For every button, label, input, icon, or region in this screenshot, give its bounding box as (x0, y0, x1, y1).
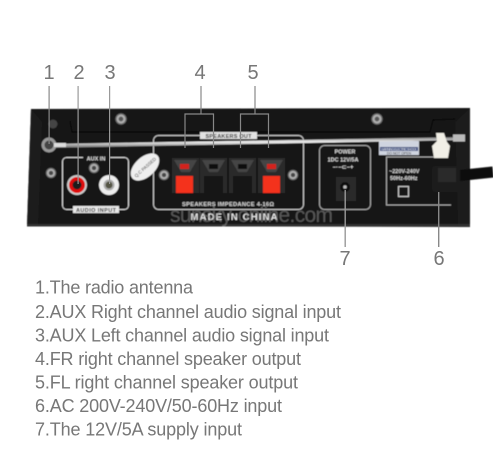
AC input group: ~220V-240V (389, 169, 420, 175)
terminal FR plus (172, 158, 199, 193)
screws (46, 113, 383, 180)
legend text list: 6.AC 200V-240V/50-60Hz input (35, 396, 282, 416)
callout 7 (339, 190, 351, 270)
speaker output group: SPEAKERS IMPEDANCE 4-16Ω (182, 202, 274, 208)
legend text list: 4.FR right channel speaker output (35, 349, 301, 369)
white RCA jack (99, 175, 119, 195)
legend text list: 3.AUX Left channel audio signal input (35, 326, 329, 346)
callout 2 (73, 62, 85, 184)
callout 1 (43, 62, 55, 144)
callout 3 (104, 62, 116, 184)
aux input group (62, 155, 128, 214)
legend text list: 7.The 12V/5A supply input (35, 420, 242, 440)
legend text list: 5.FL right channel speaker output (35, 372, 298, 392)
antenna clip (432, 133, 450, 158)
power input group: −·−⊂−+ (332, 165, 354, 171)
speaker output group (154, 132, 304, 210)
callout 6 (433, 192, 445, 270)
callout 3: 3 (104, 62, 116, 84)
AC input group (379, 141, 493, 205)
telescopic antenna (42, 133, 465, 158)
DC jack (336, 177, 356, 201)
AC input group: DO NOT OPEN (387, 152, 412, 156)
callout 6: 6 (433, 248, 445, 270)
amplifier rear panel (27, 108, 470, 227)
power input group (320, 146, 370, 210)
aux input group: AUDIO INPUT (76, 208, 117, 214)
power input group: 1DC 12V/5A (328, 158, 358, 164)
QC sticker: Q.C PASSED (134, 156, 158, 178)
power input group: POWER (335, 150, 355, 156)
callout 5: 5 (247, 62, 259, 84)
callout 1: 1 (43, 62, 55, 84)
legend text list: 2.AUX Right channel audio signal input (35, 302, 341, 322)
legend text list (35, 278, 341, 440)
amplifier illustration (27, 108, 493, 227)
watermark: sunsky-online.com (170, 204, 333, 227)
power cord (432, 166, 493, 192)
callout 4 (185, 62, 214, 148)
callout 4: 4 (194, 62, 206, 84)
made in china: MADE IN CHINA (190, 212, 278, 223)
callout 7: 7 (339, 248, 351, 270)
AC input group: WARNING ELECTRIC SHOCK (381, 147, 418, 151)
callout 5 (240, 62, 268, 148)
legend text list: 1.The radio antenna (35, 278, 194, 298)
speaker output group: SPEAKERS OUT (206, 134, 252, 140)
aux input group: AUX IN (87, 156, 105, 162)
AC input group: 50Hz-60Hz (390, 176, 418, 182)
terminal FL minus (229, 158, 256, 193)
callout 2: 2 (73, 62, 85, 84)
terminal FR minus (200, 158, 227, 193)
QC sticker (126, 148, 164, 186)
terminal FL plus (258, 158, 285, 193)
red RCA jack (67, 175, 87, 195)
